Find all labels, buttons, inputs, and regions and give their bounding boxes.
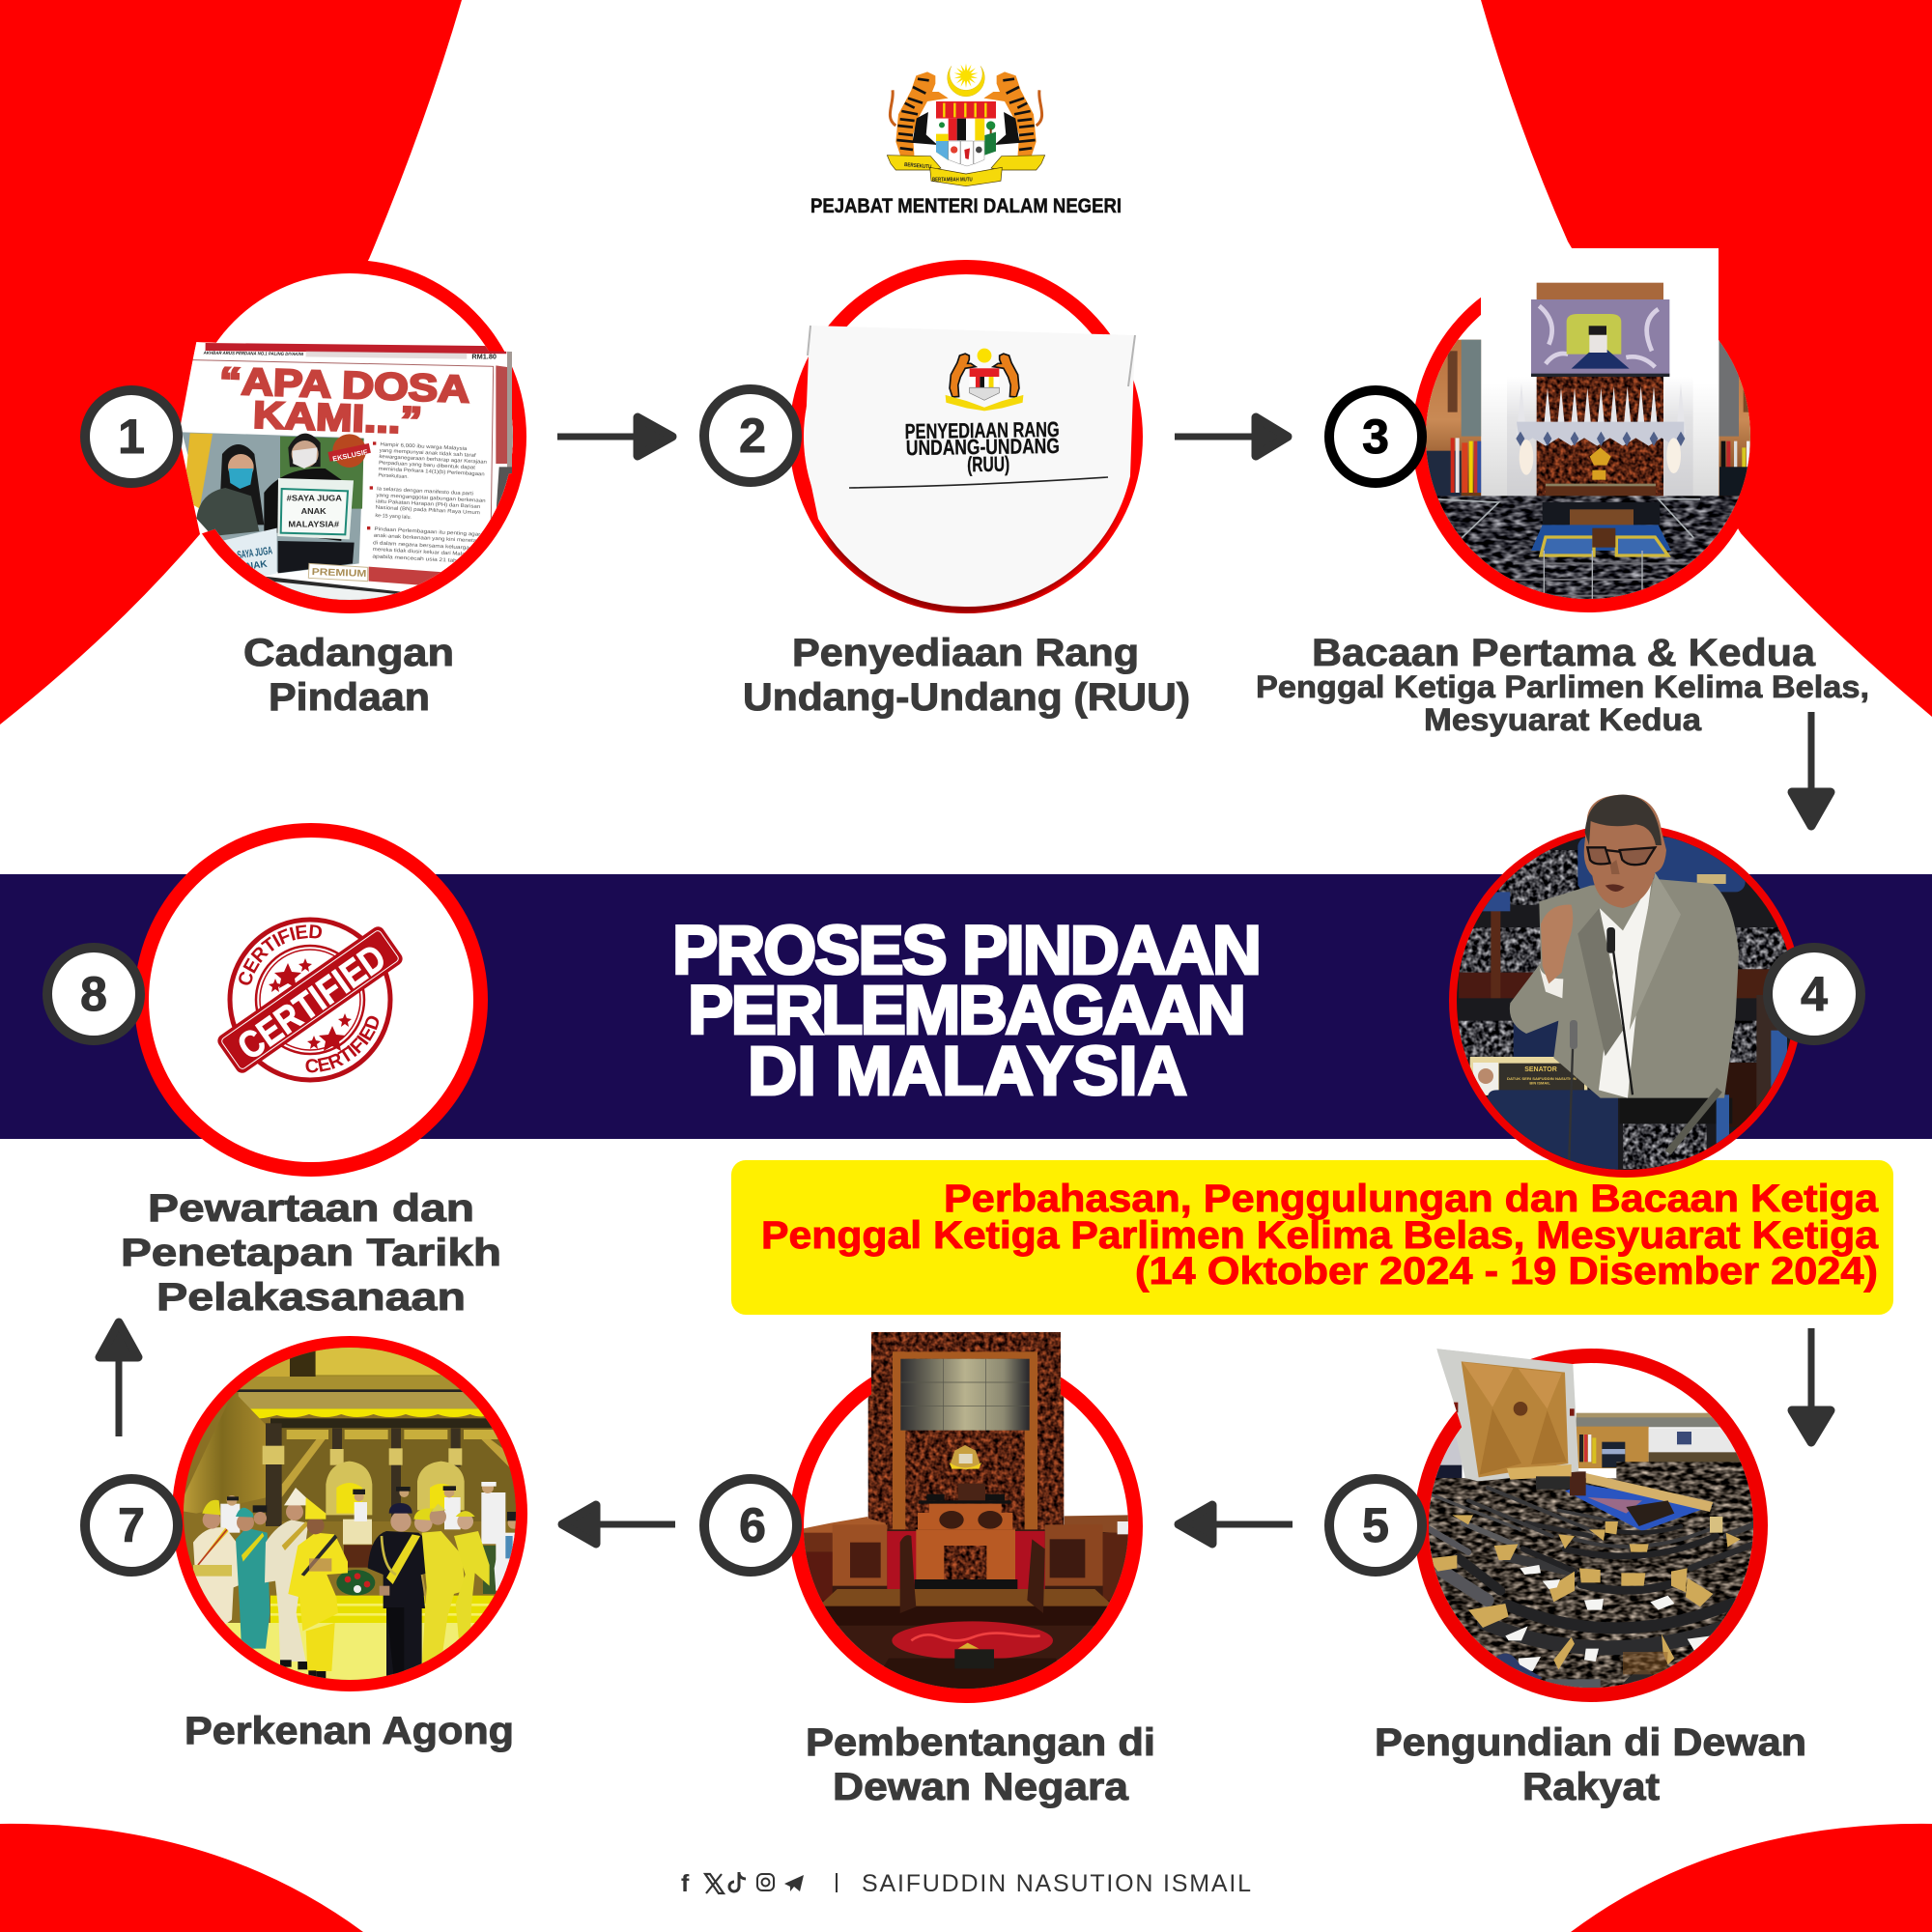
icon: telegram bbox=[784, 1875, 804, 1891]
step 2 badge: 2 bbox=[739, 409, 766, 463]
step 1 panel: newspaper circle: Hampir 6,000 ibu warga Malaysia bbox=[380, 441, 467, 452]
step 3 label: Bacaan Pertama & Kedua bbox=[1312, 632, 1816, 674]
icon: x bbox=[705, 1874, 724, 1893]
decorative red shape: bottom right bbox=[1571, 1824, 1932, 1932]
step 6 label: Dewan Negara bbox=[833, 1766, 1129, 1808]
small emblem on paper bbox=[946, 349, 1023, 411]
callout: debate and third reading dates bbox=[731, 1160, 1893, 1315]
callout: debate and third reading dates: (14 Oktober 2024 - 19 Disember 2024) bbox=[1135, 1250, 1878, 1293]
icon: instagram bbox=[757, 1874, 774, 1890]
emblem: Malaysian coat of arms: BERTAMBAH MUTU bbox=[932, 177, 973, 183]
step 3 badge: 3 bbox=[1362, 410, 1389, 464]
step 5 label bbox=[1375, 1721, 1806, 1808]
step 2 label: Penyediaan Rang bbox=[792, 632, 1139, 674]
stamp icon: CERTIFIED bbox=[231, 937, 393, 1068]
step 1 panel: newspaper circle: apabila mencecah usia 21 tahun. bbox=[372, 554, 466, 564]
step 8 badge: 8 bbox=[80, 967, 107, 1021]
step 1 panel: newspaper circle: PREMIUM bbox=[312, 567, 367, 580]
title: DI MALAYSIA bbox=[748, 1034, 1187, 1110]
step 1 panel: newspaper circle: Ia selaras dengan manifesto dua parti bbox=[377, 486, 473, 497]
step 6 label bbox=[806, 1721, 1155, 1808]
step 3 panel: parliament chamber bbox=[1415, 248, 1750, 612]
step 3 label: Penggal Ketiga Parlimen Kelima Belas, bbox=[1256, 669, 1869, 704]
arrow: step 4 to 5 bbox=[1792, 1328, 1831, 1442]
arrow: step 5 to 6 bbox=[1179, 1505, 1293, 1544]
arrow: step 6 to 7 bbox=[562, 1505, 675, 1544]
callout: debate and third reading dates: Penggal Ketiga Parlimen Kelima Belas, Mesyuarat Ketiga bbox=[761, 1214, 1879, 1257]
background guards bbox=[220, 1492, 519, 1591]
step 1 panel: newspaper circle: yang mempunyai anak tidak sah taraf bbox=[380, 448, 476, 459]
step 8 label: Penetapan Tarikh bbox=[121, 1232, 501, 1274]
step 3 label: Mesyuarat Kedua bbox=[1424, 702, 1701, 737]
step 3 label bbox=[1256, 632, 1869, 737]
icon: tiktok bbox=[729, 1872, 746, 1891]
step 1 panel: newspaper circle: AKHBAR ARUS PERDANA NO.1 PALING DIYAKINI bbox=[203, 351, 304, 356]
step 1 label: Cadangan bbox=[243, 632, 454, 674]
dignitary yellow right bbox=[422, 1531, 466, 1664]
curved desk rows bbox=[1430, 1488, 1758, 1648]
step 2 badge bbox=[704, 389, 797, 482]
step 1 panel: newspaper circle: KAMI...” bbox=[252, 394, 423, 442]
step 1 panel: newspaper circle: SAYA JUGA bbox=[237, 545, 273, 561]
bill title on paper bbox=[904, 417, 1060, 477]
step 1 panel: newspaper circle: Nasional (BN) pada Pilihan Raya Umum bbox=[376, 505, 481, 516]
dignitary yellow far right bbox=[454, 1531, 490, 1640]
step 8 label bbox=[121, 1187, 501, 1319]
step 1 panel: newspaper circle: Persekutuan. bbox=[378, 472, 409, 480]
step 8 label: Pewartaan dan bbox=[148, 1187, 474, 1230]
step 7 label: Perkenan Agong bbox=[185, 1710, 514, 1752]
step 4 panel: speaker in parliament: DATUK SERI SAIFUDDIN NASUTION bbox=[1507, 1076, 1577, 1081]
speaker head above ring bbox=[1584, 795, 1666, 908]
step 6 badge bbox=[704, 1479, 797, 1572]
step 1 panel: newspaper circle: meminda Perkara 14(1)(b) Perlembagaan bbox=[379, 467, 485, 477]
bill title on paper: (RUU) bbox=[967, 452, 1009, 476]
step 8 panel: certified stamp bbox=[135, 823, 488, 1177]
arrow: step 3 to 4 bbox=[1792, 712, 1831, 826]
step 8 label: Pelakasanaan bbox=[156, 1276, 466, 1319]
step 1 panel: newspaper circle: ke-15 yang lalu. bbox=[375, 513, 412, 521]
step 1 panel: newspaper circle: ANAK bbox=[301, 506, 327, 516]
decorative red shape: top left bbox=[0, 0, 462, 724]
step 4 badge bbox=[1768, 948, 1861, 1040]
step 6 panel: Dewan Negara chamber bbox=[789, 1332, 1143, 1710]
title bbox=[672, 913, 1262, 1110]
arrow: step 1 to 2 bbox=[557, 417, 672, 456]
step 5 badge bbox=[1329, 1479, 1422, 1572]
heading: ministry office: PEJABAT MENTERI DALAM NEGERI bbox=[810, 195, 1122, 217]
step 1 badge bbox=[85, 390, 178, 483]
step 1 label: Pindaan bbox=[269, 676, 430, 719]
step 1 panel: newspaper circle bbox=[173, 260, 526, 613]
step 1 panel: newspaper circle: anak-anak berkenaan yang kini menetap bbox=[374, 533, 480, 544]
microphones bbox=[1612, 952, 1634, 1095]
step 1 panel: newspaper circle: RM1.80 bbox=[471, 353, 497, 361]
person body bbox=[1510, 879, 1739, 1098]
dignitary yellow main bbox=[288, 1533, 348, 1631]
step 1 panel: newspaper circle: yang menganggotai gabungan berkenaan bbox=[376, 493, 486, 504]
emblem: Malaysian coat of arms: BERSEKUTU bbox=[904, 162, 932, 170]
step 7 panel: royal assent ceremony bbox=[173, 1336, 527, 1691]
footer: divider and name: SAIFUDDIN NASUTION ISMAIL bbox=[862, 1870, 1251, 1897]
step 4 panel: speaker in parliament: BIN ISMAIL bbox=[1529, 1081, 1550, 1086]
step 1 panel: newspaper circle: iaitu Pakatan Harapan (PH) dan Barisan bbox=[376, 498, 480, 510]
step 5 badge: 5 bbox=[1362, 1498, 1389, 1552]
step 7 badge: 7 bbox=[118, 1498, 145, 1552]
step 1 panel: newspaper circle: di dalam negara bersama keluarga bbox=[373, 540, 469, 552]
step 6 label: Pembentangan di bbox=[806, 1721, 1155, 1764]
title: PROSES PINDAAN bbox=[672, 913, 1262, 989]
dignitary teal bbox=[236, 1528, 270, 1649]
wood wall panel bbox=[1436, 1349, 1578, 1481]
step 1 panel: newspaper circle: #SAYA JUGA bbox=[287, 493, 342, 502]
step 1 panel: newspaper circle: Pindaan Perlembagaan itu penting agar bbox=[374, 526, 481, 538]
paper sheet bbox=[805, 326, 1135, 607]
dignitary cream left bbox=[193, 1527, 239, 1625]
step 1 panel: newspaper circle: mereka tidak diusir keluar dari Malaysia bbox=[373, 547, 475, 558]
icon: facebook: f bbox=[681, 1870, 690, 1897]
step 5 label: Rakyat bbox=[1522, 1766, 1660, 1808]
step 1 badge: 1 bbox=[118, 410, 145, 464]
dignitary white bbox=[265, 1520, 307, 1662]
stamp icon: CERTIFIED bbox=[305, 1016, 379, 1072]
decorative red shape: bottom left bbox=[0, 1824, 363, 1932]
step 4 panel: speaker in parliament bbox=[1449, 795, 1804, 1179]
footer: social icons bbox=[681, 1870, 804, 1897]
step 1 panel: newspaper circle: “APA DOSA bbox=[218, 359, 470, 411]
arrow: step 2 to 3 bbox=[1175, 417, 1288, 456]
title band bbox=[0, 874, 1932, 1139]
step 5 label: Pengundian di Dewan bbox=[1375, 1721, 1806, 1764]
step 5 panel: Dewan Rakyat chamber bbox=[1414, 1349, 1771, 1710]
step 2 label bbox=[743, 632, 1190, 719]
step 1 panel: newspaper circle: MALAYSIA# bbox=[288, 520, 339, 529]
step 7 badge bbox=[85, 1479, 178, 1572]
step 6 badge: 6 bbox=[739, 1498, 766, 1552]
step 1 panel: newspaper circle: Perpaduan yang baru dibentuk dapat bbox=[379, 460, 476, 471]
nameplate bbox=[1470, 1057, 1587, 1095]
bill title on paper: PENYEDIAAN RANG bbox=[904, 417, 1060, 443]
step 2 panel: draft bill paper circle bbox=[789, 260, 1143, 613]
step 1 panel: newspaper circle: ANAK bbox=[239, 559, 269, 574]
step 4 panel: speaker in parliament: SENATOR bbox=[1524, 1066, 1557, 1073]
stamp icon: CERTIFIED bbox=[239, 924, 323, 985]
emblem: Malaysian coat of arms bbox=[887, 64, 1045, 186]
callout: debate and third reading dates: Perbahasan, Penggulungan dan Bacaan Ketiga bbox=[944, 1178, 1879, 1220]
step 2 label: Undang-Undang (RUU) bbox=[743, 676, 1190, 719]
step 8 badge bbox=[47, 948, 140, 1040]
arrow: step 7 to 8 bbox=[99, 1322, 138, 1436]
title: PERLEMBAGAAN bbox=[688, 973, 1246, 1049]
step 1 label bbox=[243, 632, 454, 719]
decorative red shape: top right bbox=[1481, 0, 1932, 717]
dignitary black uniform bbox=[367, 1531, 425, 1608]
step 4 badge: 4 bbox=[1801, 967, 1828, 1021]
step 3 badge bbox=[1329, 390, 1422, 483]
photo in newspaper bbox=[182, 432, 364, 573]
bill title on paper: UNDANG-UNDANG bbox=[906, 434, 1060, 460]
step 1 panel: newspaper circle: EKSLUSIF bbox=[331, 447, 369, 464]
step 1 panel: newspaper circle: kewarganegaraan berharap agar Kerajaan bbox=[379, 454, 487, 466]
